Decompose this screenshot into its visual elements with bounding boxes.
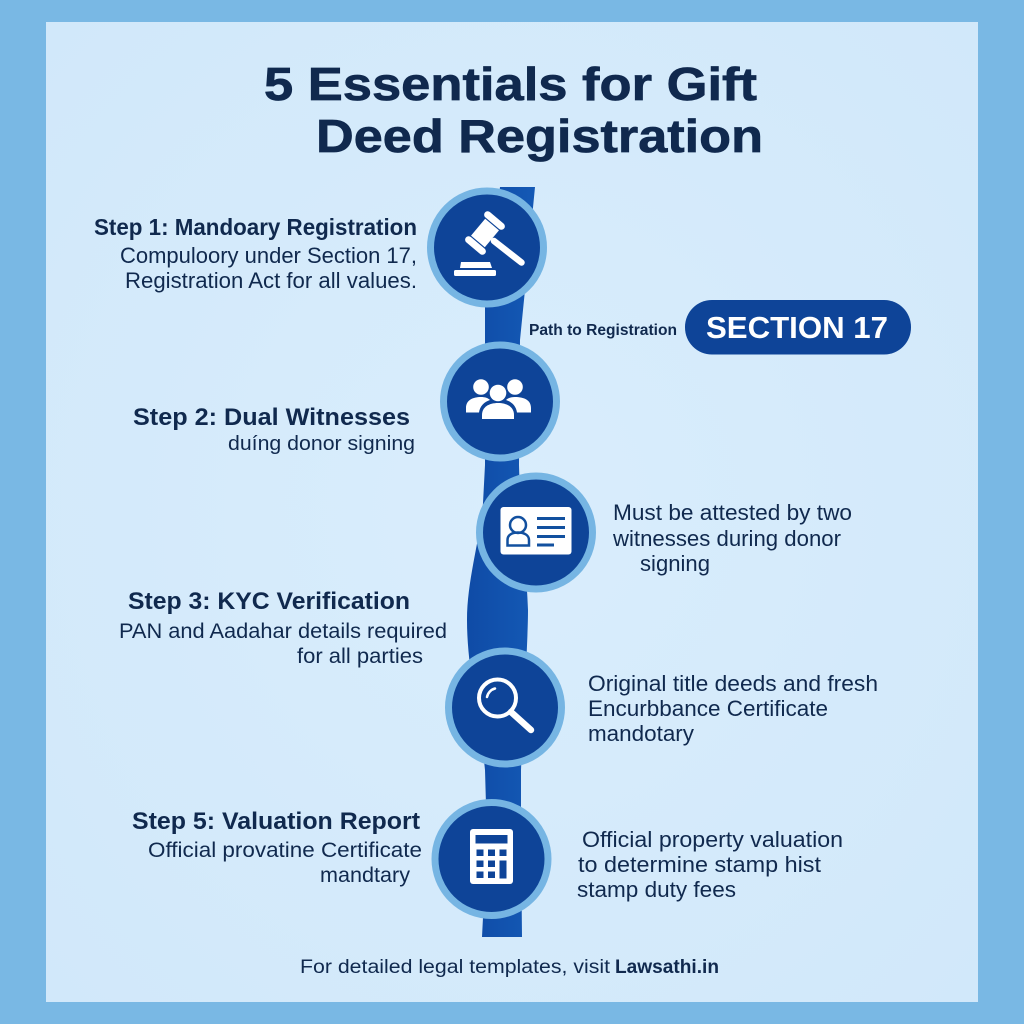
valuation text [577, 827, 843, 902]
valuation text: to determine stamp hist [578, 852, 821, 877]
section 17 badge: SECTION 17 [706, 310, 888, 345]
title [264, 58, 763, 162]
title deeds text: Encurbbance Certificate [588, 696, 828, 721]
card text: signing [640, 551, 710, 576]
footer: Lawsathi.in [615, 957, 719, 978]
winding path ribbon [467, 187, 535, 937]
icon: people [444, 345, 556, 458]
icon: calculator [435, 802, 548, 916]
section 17 badge [685, 300, 911, 354]
step 5 text: Official provatine Certificate [148, 839, 422, 862]
title deeds text [588, 671, 878, 746]
step 1 text [94, 214, 417, 293]
footer [300, 957, 719, 978]
step 2 text [133, 404, 415, 455]
title: Deed Registration [316, 110, 763, 162]
valuation text: Official property valuation [582, 827, 843, 852]
valuation text: stamp duty fees [577, 877, 736, 902]
step 5 text: Step 5: Valuation Report [132, 808, 420, 835]
step 5 text [132, 808, 422, 887]
step 2 text: duíng donor signing [228, 433, 415, 455]
title deeds text: Original title deeds and fresh [588, 671, 878, 696]
step 3 text: for all parties [297, 645, 423, 668]
icon: gavel [430, 191, 544, 304]
step 1 text: Compuloory under Section 17, [120, 243, 417, 268]
step 3 text: PAN and Aadahar details required [119, 620, 447, 643]
icon: magnifier [448, 651, 562, 764]
step 3 text: Step 3: KYC Verification [128, 588, 410, 615]
step 1 text: Registration Act for all values. [125, 268, 417, 293]
footer: For detailed legal templates, visit [300, 957, 611, 978]
step 5 text: mandtary [320, 864, 411, 887]
step 3 text [119, 588, 447, 668]
title: 5 Essentials for Gift [264, 58, 757, 110]
card text: witnesses during donor [612, 526, 841, 551]
card text [612, 500, 852, 576]
step 1 text: Step 1: Mandoary Registration [94, 214, 417, 240]
path label: Path to Registration [529, 322, 677, 339]
title deeds text: mandotary [588, 721, 694, 746]
step 2 text: Step 2: Dual Witnesses [133, 404, 410, 431]
icon: ID card [480, 476, 592, 589]
card text: Must be attested by two [613, 500, 852, 525]
